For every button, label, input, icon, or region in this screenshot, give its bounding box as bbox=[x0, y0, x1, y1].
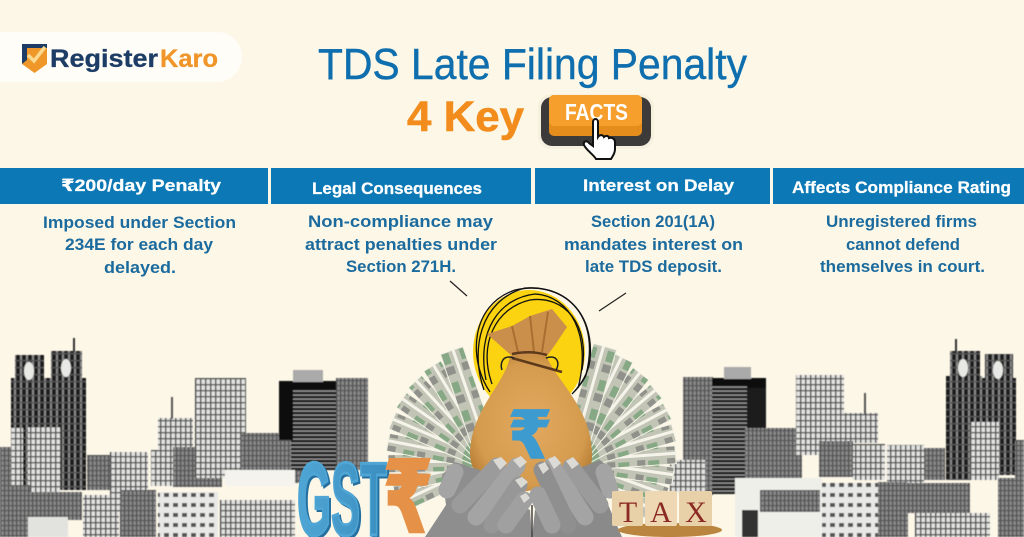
panel: Penalty: ₹200/day Penalty bbox=[61, 176, 222, 195]
FACTS button: FACTS bbox=[565, 99, 628, 125]
panel: Compliance Rating: Affects Compliance Rating bbox=[792, 178, 1011, 197]
panel: Interest on Delay: mandates interest on bbox=[564, 236, 743, 254]
panel: Compliance Rating: themselves in court. bbox=[820, 258, 985, 276]
panel: Penalty: delayed. bbox=[104, 259, 176, 277]
icon: TAX blocks: A bbox=[650, 496, 672, 529]
icon: TAX blocks: X bbox=[685, 496, 707, 529]
panel: Legal Consequences: Section 271H. bbox=[346, 258, 456, 276]
panel: Legal Consequences: Legal Consequences bbox=[312, 179, 482, 198]
panel: Penalty: Imposed under Section bbox=[43, 214, 236, 232]
logo: RegisterKaro: Register bbox=[50, 45, 158, 73]
panel: Penalty bbox=[0, 168, 268, 277]
panel: Compliance Rating bbox=[773, 168, 1024, 276]
accent lines bbox=[450, 281, 626, 311]
panel: Interest on Delay bbox=[535, 168, 770, 276]
title: TDS Late Filing Penalty bbox=[318, 40, 747, 89]
icon: GST letters bbox=[297, 442, 389, 537]
icon: money bag bbox=[470, 309, 592, 492]
icon: blue rupee: ₹ bbox=[508, 398, 552, 472]
icon: hands bbox=[425, 456, 622, 537]
panel: Legal Consequences bbox=[271, 168, 531, 276]
panel: Legal Consequences: attract penalties under bbox=[305, 236, 498, 254]
FACTS button bbox=[538, 94, 654, 159]
icon: TAX blocks bbox=[612, 491, 722, 537]
panel: Legal Consequences: Non-compliance may bbox=[308, 213, 494, 231]
icon: TAX blocks: T bbox=[619, 496, 637, 529]
panel: Interest on Delay: late TDS deposit. bbox=[585, 258, 722, 276]
icon: money fan right bbox=[560, 343, 676, 522]
panel: Compliance Rating: cannot defend bbox=[846, 236, 960, 254]
subtitle: 4 Key: 4 Key bbox=[407, 93, 524, 141]
skyline: right buildings bbox=[670, 339, 1024, 537]
icon: yellow circle with scribble bbox=[473, 288, 590, 414]
icon: money fan left bbox=[386, 347, 501, 512]
icon: pointing hand bbox=[584, 119, 615, 159]
panel: Compliance Rating: Unregistered firms bbox=[826, 213, 977, 231]
skyline: left buildings bbox=[0, 338, 368, 537]
panel: Penalty: 234E for each day bbox=[65, 236, 214, 254]
logo: RegisterKaro bbox=[0, 32, 242, 82]
logo: RegisterKaro: Karo bbox=[160, 45, 218, 73]
panel: Interest on Delay: Section 201(1A) bbox=[591, 213, 715, 231]
panel: Interest on Delay: Interest on Delay bbox=[583, 176, 735, 195]
